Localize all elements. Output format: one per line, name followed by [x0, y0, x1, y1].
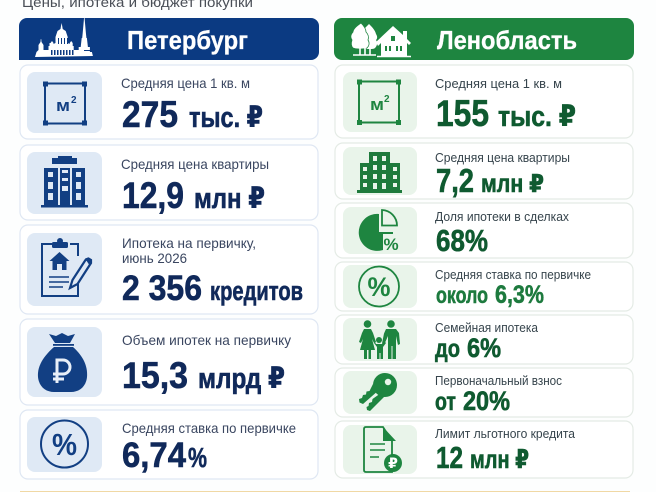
icon: square metre: м — [56, 96, 70, 115]
card: apartment price LO: млн ₽ — [481, 170, 544, 198]
card: price per sqm SPb — [20, 65, 318, 139]
icon: document with rouble: ₽ — [388, 455, 398, 471]
card: subsidised loan limit LO — [335, 421, 633, 478]
panel: Petersburg — [19, 15, 319, 479]
card: rate LO: Средняя ставка по первичке — [435, 267, 591, 282]
card: mortgage count SPb: 2 356 — [122, 269, 202, 308]
card: price per sqm SPb: 275 — [122, 94, 178, 135]
card: mortgage volume SPb: 15,3 — [122, 355, 188, 396]
header: Leningrad region — [334, 18, 634, 60]
icon: trees and house — [351, 23, 411, 57]
card: mortgage share LO: 68% — [436, 223, 488, 258]
icon: percent circle: % — [52, 427, 77, 462]
header: Petersburg — [19, 15, 319, 60]
icon: money bag with rouble — [38, 333, 87, 392]
card: down payment LO — [335, 368, 633, 417]
icon: square metre — [357, 80, 401, 125]
card: price per sqm LO: Средняя цена 1 кв. м — [435, 76, 562, 91]
card: apartment price SPb: млн ₽ — [194, 183, 265, 215]
card: mortgage volume SPb: млрд ₽ — [198, 363, 285, 395]
card: rate SPb: 6,74 — [122, 436, 186, 475]
card: price per sqm SPb: Средняя цена 1 кв. м — [121, 75, 250, 91]
card: rate SPb: % — [188, 442, 207, 473]
card: rate SPb: Средняя ставка по первичке — [122, 420, 296, 436]
card: mortgage count SPb — [20, 225, 318, 314]
icon: square metre: 2 — [71, 95, 77, 106]
card: down payment LO: от — [435, 388, 456, 416]
icon: apartment block — [357, 152, 402, 193]
icon: apartment building — [41, 156, 88, 208]
icon: pie chart with percent: % — [383, 235, 399, 254]
header: Leningrad region: Ленобласть — [437, 25, 577, 55]
icon: percent circle: % — [368, 272, 390, 302]
card: mortgage share LO — [335, 203, 633, 258]
icon: clipboard with house and pen — [42, 238, 91, 296]
header: Petersburg: Петербург — [127, 25, 248, 55]
card: apartment price SPb: Средняя цена квартиры — [121, 156, 269, 172]
card: apartment price LO: Средняя цена квартиры — [435, 150, 570, 165]
icon: pie chart with percent — [359, 210, 399, 254]
footer strip — [20, 491, 630, 492]
card: mortgage volume SPb: Объем ипотек на первичку — [122, 332, 291, 348]
icon: square metre: м — [370, 95, 384, 114]
card: price per sqm LO — [335, 65, 633, 138]
card: rate LO: 6,3% — [495, 281, 544, 309]
card: down payment LO: Первоначальный взнос — [435, 373, 562, 388]
card: price per sqm LO: тыс. ₽ — [498, 101, 576, 133]
card: mortgage count SPb: июнь 2026 — [122, 250, 187, 266]
card: rate SPb — [20, 410, 318, 479]
card: mortgage share LO: Доля ипотеки в сделках — [435, 209, 569, 224]
icon: Petersburg skyline — [35, 15, 94, 57]
icon: keys — [359, 373, 397, 411]
icon: percent circle — [41, 420, 88, 468]
panel: Leningrad region — [334, 18, 634, 478]
card: mortgage count SPb: Ипотека на первичку, — [122, 235, 256, 251]
card: apartment price SPb — [20, 145, 318, 220]
card: subsidised loan limit LO: млн ₽ — [470, 444, 529, 474]
card: rate LO: около — [436, 282, 488, 308]
card: price per sqm SPb: тыс. ₽ — [189, 102, 263, 134]
card: apartment price LO: 7,2 — [436, 162, 474, 199]
card: mortgage volume SPb — [20, 319, 318, 405]
card: rate LO — [335, 262, 633, 311]
card: mortgage count SPb: кредитов — [210, 276, 303, 306]
card: family mortgage LO — [335, 315, 633, 364]
card: apartment price SPb: 12,9 — [122, 175, 184, 216]
card: family mortgage LO: 6% — [467, 333, 501, 363]
card: price per sqm LO: 155 — [436, 93, 489, 134]
icon: family — [359, 320, 400, 359]
icon: document with rouble — [364, 427, 402, 472]
icon: percent circle — [359, 266, 399, 306]
card: subsidised loan limit LO: 12 — [436, 440, 463, 475]
card: family mortgage LO: до — [435, 335, 460, 363]
icon: square metre — [43, 82, 87, 126]
card: subsidised loan limit LO: Лимит льготного кредита — [435, 426, 576, 441]
card: down payment LO: 20% — [463, 386, 510, 416]
card: apartment price LO — [335, 143, 633, 199]
card: family mortgage LO: Семейная ипотека — [435, 320, 539, 335]
icon: square metre: 2 — [384, 94, 390, 105]
